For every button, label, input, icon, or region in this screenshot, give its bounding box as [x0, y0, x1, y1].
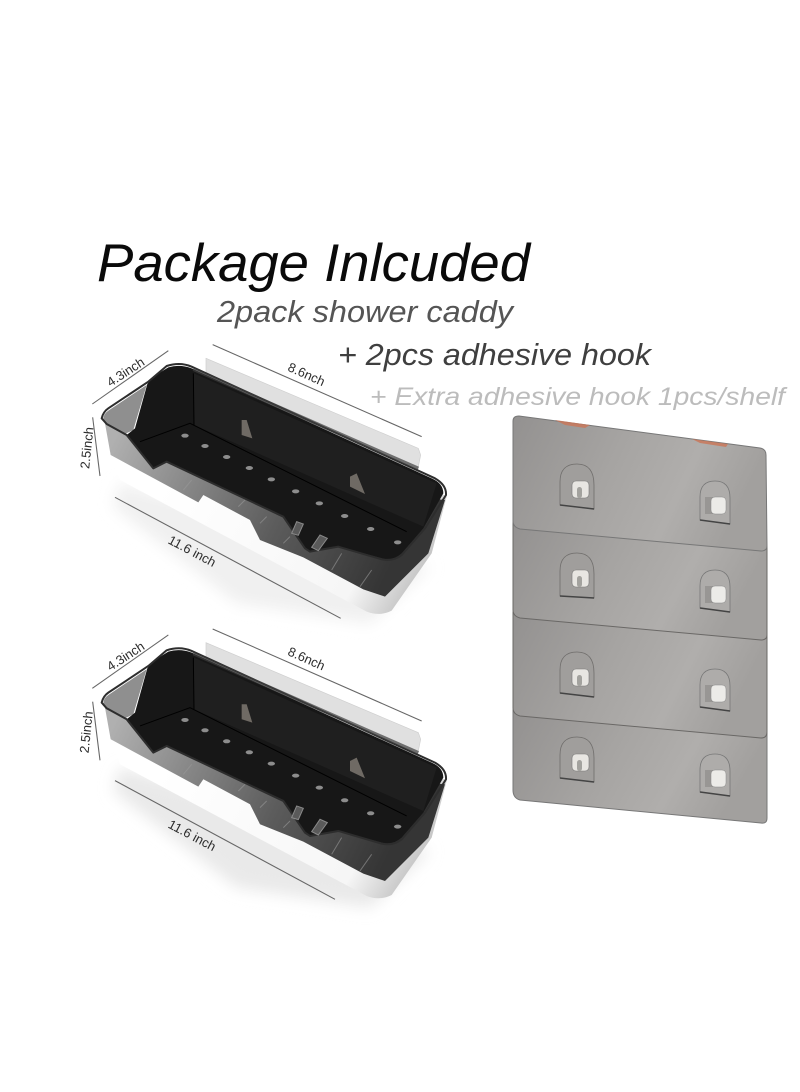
dimension labels: 2.5inch — [77, 426, 97, 469]
dimension lines — [92, 629, 422, 899]
hook row 1 right — [700, 481, 730, 524]
subtitle: extra hook: + Extra adhesive hook 1pcs/shelf — [370, 383, 788, 411]
dimension labels: 11.6 inch — [166, 532, 218, 570]
orange tape marks — [555, 420, 728, 447]
plate 3 — [513, 612, 767, 738]
dimension labels: 4.3inch — [104, 638, 147, 674]
dimension labels: 8.6nch — [286, 644, 327, 673]
title: Package Inlcuded — [97, 234, 532, 293]
hook row 4 right — [700, 754, 730, 796]
subtitle: shower caddy: 2pack shower caddy — [216, 294, 516, 329]
dimension labels: 8.6nch — [286, 359, 327, 389]
dimension labels — [77, 354, 327, 570]
hook row 3 right — [700, 669, 730, 711]
adhesive hook plates — [513, 416, 767, 823]
dimension labels: 2.5inch — [77, 711, 96, 754]
dimension labels: 11.6 inch — [166, 817, 218, 854]
dimension labels — [77, 638, 327, 854]
plate 1 — [513, 416, 767, 551]
hook row 3 left — [560, 652, 594, 697]
dimension labels: 4.3inch — [104, 354, 147, 390]
hook row 2 right — [700, 570, 730, 612]
subtitle: adhesive hook: + 2pcs adhesive hook — [338, 337, 653, 372]
plate 2 — [513, 522, 767, 640]
hook row 2 left — [560, 553, 594, 598]
shower caddy top photo — [77, 345, 447, 623]
hook row 4 left — [560, 737, 594, 782]
dimension lines — [92, 345, 422, 618]
hook row 1 left — [560, 464, 594, 509]
shower caddy bottom photo — [77, 629, 447, 908]
plate 4 — [513, 710, 767, 823]
